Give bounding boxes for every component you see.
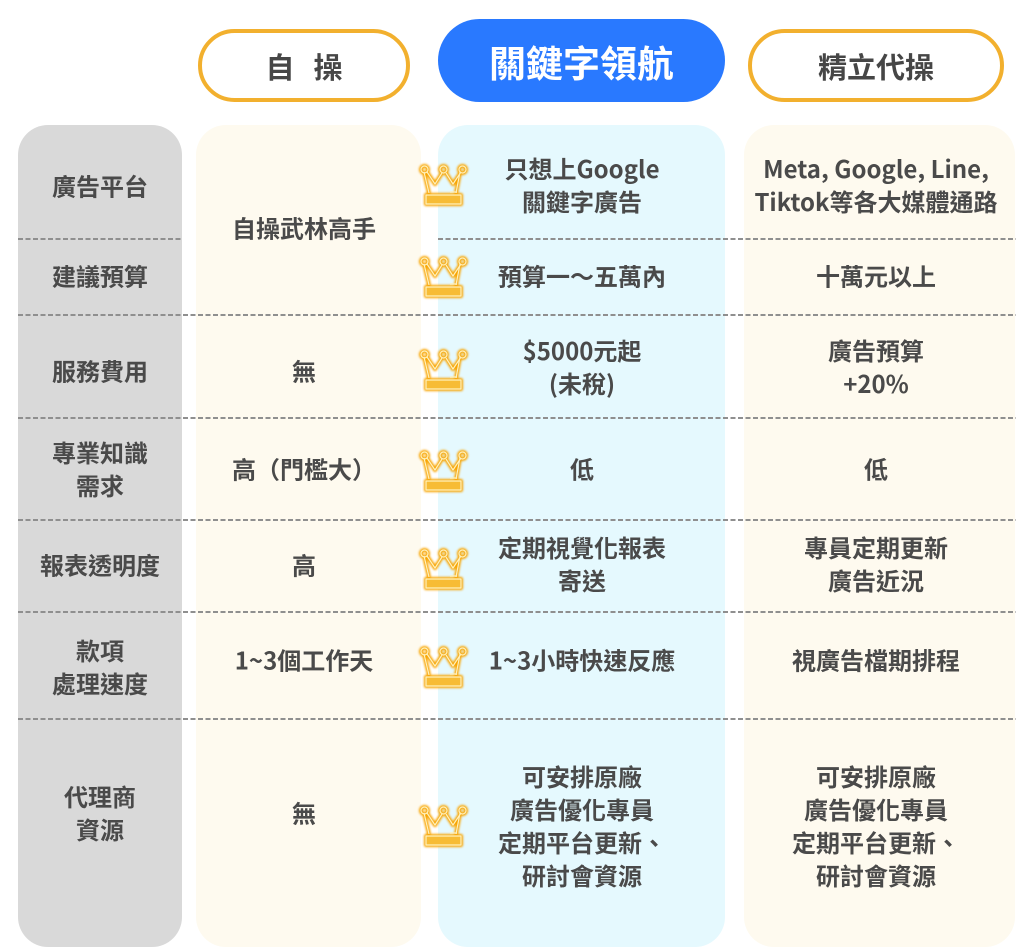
agency values: Tiktok等各大媒體通路: [754, 183, 998, 218]
icon: crown row 2: [417, 254, 470, 300]
icon: crown row 7: [417, 803, 470, 849]
value: agency speed: 視廣告檔期排程: [792, 642, 960, 676]
icon: crown row 6: [417, 644, 470, 690]
icon: crown row 1: [417, 162, 470, 208]
value: self report: 高: [292, 546, 316, 582]
heading: agency: [748, 29, 1004, 102]
value: keyword resources: 定期平台更新、: [498, 824, 666, 859]
value: keyword fee: (未稅): [549, 365, 615, 400]
heading: keyword navigator: [438, 19, 725, 102]
row label column: [18, 125, 182, 947]
value: keyword resources: [498, 758, 666, 892]
label: payment speed: 款項: [76, 632, 124, 667]
icon: crown row 4: [417, 448, 470, 494]
value: keyword expertise: 低: [570, 450, 594, 486]
label: agency resources: [64, 778, 136, 846]
value: keyword fee: $5000元起: [523, 332, 641, 367]
label: expertise: 專業知識: [52, 434, 148, 469]
heading: self-managed: [198, 29, 410, 102]
value: self expertise: 高（門檻大）: [232, 450, 376, 486]
value: keyword report: [498, 529, 666, 597]
keyword navigator values: [504, 150, 660, 218]
value: agency resources: 可安排原廠: [816, 758, 936, 793]
value: agency fee: +20%: [843, 365, 909, 400]
value: agency resources: 定期平台更新、: [792, 824, 960, 859]
value: agency expertise: 低: [864, 450, 888, 486]
label: report transparency: 報表透明度: [40, 546, 160, 582]
value: agency report: 廣告近況: [828, 562, 924, 597]
value: agency resources: 研討會資源: [816, 857, 936, 892]
value: self resources: 無: [292, 794, 316, 830]
label: expertise: [52, 434, 148, 502]
value: agency resources: 廣告優化專員: [804, 791, 948, 826]
value: keyword report: 定期視覺化報表: [498, 529, 666, 564]
value: keyword speed: 1~3小時快速反應: [489, 642, 675, 676]
value: agency resources: [792, 758, 960, 892]
icon: crown row 3: [417, 347, 470, 393]
heading: keyword navigator: 關鍵字領航: [489, 34, 674, 88]
agency values: [754, 150, 998, 218]
panel: keyword navigator column: [438, 125, 725, 947]
heading: self-managed: 操: [314, 44, 343, 86]
panel: self-managed column: [196, 125, 421, 947]
value: agency budget: 十萬元以上: [816, 258, 936, 292]
value: keyword resources: 研討會資源: [522, 857, 642, 892]
value: self speed: 1~3個工作天: [235, 642, 373, 676]
label: agency resources: 代理商: [64, 778, 136, 813]
agency values: Meta, Google, Line,: [763, 150, 989, 185]
keyword navigator values: 關鍵字廣告: [522, 183, 642, 218]
panel: agency column: [744, 125, 1015, 947]
value: agency fee: 廣告預算: [828, 332, 924, 367]
label: service fee: 服務費用: [52, 352, 148, 388]
value: keyword report: 寄送: [558, 562, 606, 597]
heading: agency: 精立代操: [818, 44, 934, 86]
value: keyword fee: [523, 332, 641, 400]
label: expertise: 需求: [76, 467, 124, 502]
label: agency resources: 資源: [76, 811, 124, 846]
row labels: 廣告平台: [52, 168, 148, 202]
value: agency fee: [828, 332, 924, 400]
value: keyword resources: 廣告優化專員: [510, 791, 654, 826]
value: agency report: 專員定期更新: [804, 529, 948, 564]
value: agency report: [804, 529, 948, 597]
value: keyword resources: 可安排原廠: [522, 758, 642, 793]
label: budget: 建議預算: [52, 258, 148, 292]
value: keyword budget: 預算一～五萬內: [498, 258, 666, 292]
self-managed values: 自操武林高手: [232, 210, 376, 244]
label: payment speed: [52, 632, 148, 700]
label: payment speed: 處理速度: [52, 665, 148, 700]
heading: self-managed: 自: [265, 44, 294, 86]
value: self fee: 無: [292, 352, 316, 388]
icon: crown row 5: [417, 546, 470, 592]
keyword navigator values: 只想上Google: [504, 150, 660, 185]
